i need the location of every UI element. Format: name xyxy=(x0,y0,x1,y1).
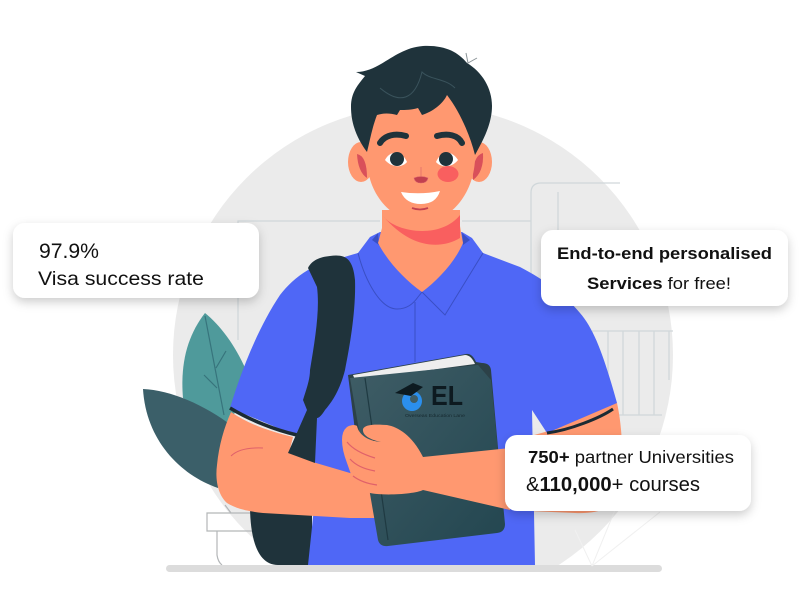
left eye xyxy=(385,152,407,166)
under-collar shadows xyxy=(372,233,470,245)
card: universities and courses xyxy=(505,435,751,511)
face xyxy=(367,85,475,222)
left sleeve hem xyxy=(230,408,297,435)
dark leaf xyxy=(143,389,232,488)
shirt xyxy=(230,232,617,565)
courses line: &110,000+ courses xyxy=(526,474,700,496)
hair strand lines xyxy=(380,72,455,98)
lower lip xyxy=(412,208,428,210)
book pages xyxy=(353,355,475,380)
book spine line xyxy=(365,378,388,540)
card subline: Services for free! xyxy=(587,274,731,293)
elbow crease xyxy=(231,448,263,456)
cheek xyxy=(438,166,458,182)
card: personalised services xyxy=(541,230,788,306)
shirt collar xyxy=(358,253,483,315)
plant pot xyxy=(207,505,255,565)
right ear xyxy=(466,142,492,182)
background circle xyxy=(173,105,673,605)
finger creases xyxy=(347,442,377,485)
backpack lower body xyxy=(250,505,312,565)
right arm behind book xyxy=(480,395,622,513)
backpack strap xyxy=(288,256,355,463)
logo wordmark: EL xyxy=(431,380,463,411)
eyebrows xyxy=(380,135,462,143)
student figure xyxy=(216,46,622,565)
neck shadow xyxy=(383,215,460,245)
nose xyxy=(414,167,428,183)
book xyxy=(348,354,505,546)
teal leaf xyxy=(182,313,246,430)
book cover xyxy=(350,365,505,546)
right sleeve hem xyxy=(547,409,613,433)
chair line art xyxy=(575,510,660,566)
floor line xyxy=(166,565,662,572)
logo ring xyxy=(402,391,422,411)
left arm xyxy=(216,412,385,518)
universities line: 750+ partner Universities xyxy=(528,447,734,467)
left ear xyxy=(348,142,374,182)
hand and forearm over book xyxy=(342,425,510,510)
shirt placket xyxy=(414,302,416,362)
room line art xyxy=(238,183,673,415)
plant xyxy=(143,313,255,565)
stat label: Visa success rate xyxy=(38,268,204,290)
right eye xyxy=(436,152,458,166)
hair tuft xyxy=(466,53,477,63)
logo cap xyxy=(395,383,423,396)
logo tagline: Overseas Education Lane xyxy=(405,413,466,418)
hair xyxy=(351,46,492,155)
book back outline xyxy=(348,354,500,470)
smile xyxy=(401,191,440,204)
neck xyxy=(378,210,463,292)
teal leaf veins xyxy=(204,316,226,415)
logo xyxy=(395,380,466,418)
card: visa success xyxy=(13,223,259,298)
stat value: 97.9% xyxy=(39,240,99,263)
card headline: End-to-end personalised xyxy=(557,245,772,263)
